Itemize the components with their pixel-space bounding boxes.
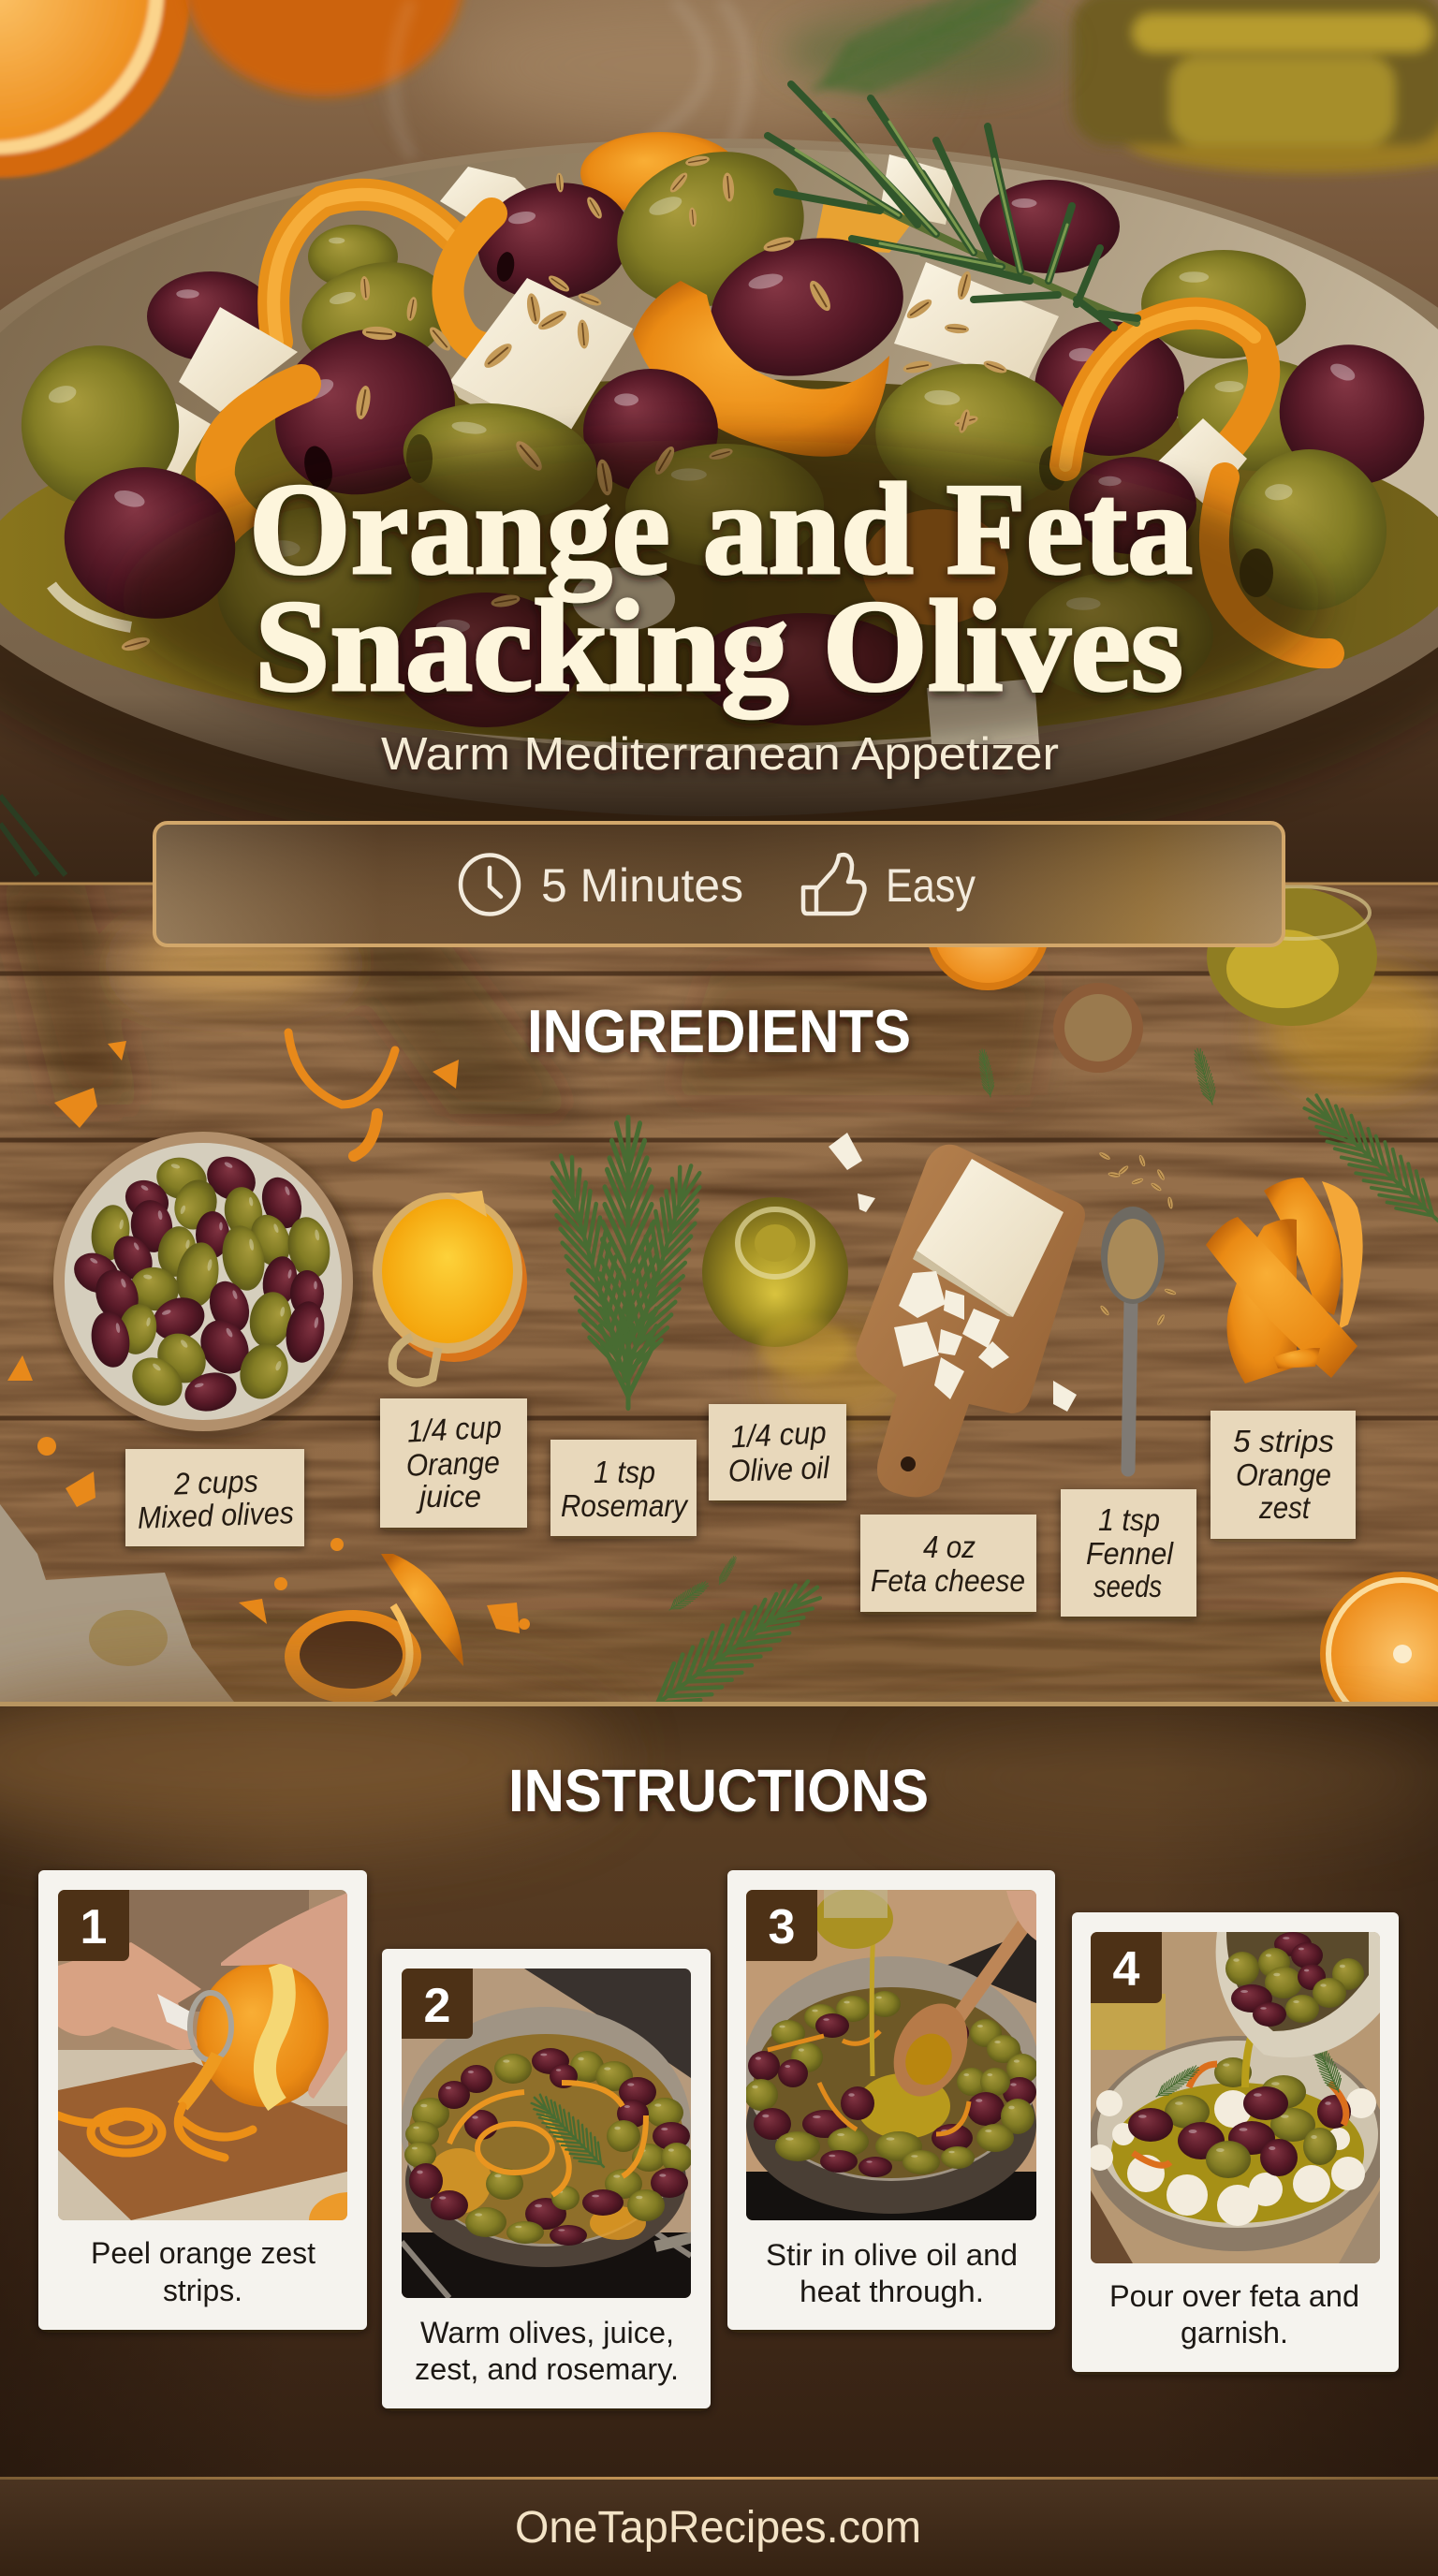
footer text: OneTapRecipes.com [515, 2503, 921, 2553]
note: 2 cups mixed olives: Mixed olives [137, 1495, 294, 1535]
note: 2 cups mixed olives: 2 cups [172, 1463, 258, 1501]
heading: instructions: INSTRUCTIONS [508, 1757, 929, 1824]
back layer of olives, feta and peel [4, 126, 1438, 744]
plank seams [0, 973, 1438, 1418]
info banner [154, 823, 1284, 945]
icon: clock [461, 856, 519, 914]
caption: garnish. [1181, 2316, 1288, 2349]
icon: glass of oil, top right [1207, 886, 1377, 1026]
label: 5 minutes: 5 Minutes [541, 859, 743, 912]
note: 1/4 cup orange juice: Orange [405, 1444, 500, 1483]
note: 1/4 cup olive oil: 1/4 cup [730, 1414, 828, 1455]
badge: 2: 2 [424, 1979, 450, 2033]
caption: Peel orange zest [91, 2236, 315, 2270]
note: 1/4 cup olive oil [709, 1404, 846, 1500]
icon: rosemary sprig, bottom [636, 1567, 832, 1728]
image: pouring over feta [1087, 1932, 1387, 2263]
note: 1 tsp fennel seeds: Fennel [1086, 1536, 1175, 1571]
icon: blurred olive oil jar [1072, 0, 1438, 173]
icon: orange peel cup [285, 1554, 463, 1704]
icon: blurred whole orange [183, 0, 463, 96]
dark wash behind title [122, 440, 1320, 758]
small rosemary, lower left [0, 796, 66, 875]
note: 1 tsp fennel seeds [1061, 1489, 1196, 1617]
panel: instructions background [0, 1676, 1438, 2576]
scattered peel, top left [288, 1032, 395, 1156]
note: 1 tsp fennel seeds: seeds [1093, 1569, 1162, 1603]
icon: thumbs up [803, 855, 864, 914]
badge: 1: 1 [81, 1900, 107, 1954]
caption: zest, and rosemary. [415, 2352, 679, 2386]
bowl [0, 139, 1438, 816]
icon: blurred rosemary [782, 0, 1063, 115]
badge: 4 [1091, 1932, 1162, 2003]
caption [1109, 2279, 1359, 2349]
note: 2 cups mixed olives [125, 1449, 304, 1546]
badge: 1 [58, 1890, 129, 1961]
icon: orange slice under banner [926, 867, 1049, 990]
badge: 3: 3 [769, 1900, 795, 1954]
icon: fennel seeds scatter [1098, 1151, 1177, 1326]
caption [766, 2238, 1018, 2308]
orange chips [7, 1041, 530, 1633]
fennel seeds on hero [120, 154, 1008, 653]
image: stirring in olive oil [743, 1889, 1039, 2228]
icon: cutting board with feta [829, 1133, 1085, 1497]
caption: strips. [163, 2274, 242, 2307]
caption [91, 2236, 315, 2307]
icon: blurred orange half, top left [0, 0, 190, 178]
note: 1 tsp rosemary [550, 1440, 697, 1536]
footer bar [0, 2477, 1438, 2576]
icon: bowl of ground fennel [1053, 983, 1143, 1073]
caption: Stir in olive oil and [766, 2238, 1018, 2272]
note: 5 strips orange zest [1211, 1411, 1356, 1539]
badge: 3 [746, 1890, 817, 1961]
rosemary garnish [768, 84, 1137, 328]
icon: jug of orange juice [373, 1191, 527, 1383]
front olives, left and right [47, 443, 1393, 653]
note: 1 tsp fennel seeds: 1 tsp [1098, 1502, 1160, 1537]
badge: 2 [402, 1969, 473, 2039]
steam wisps [393, 0, 747, 164]
note: 5 strips orange zest: 5 strips [1233, 1424, 1334, 1458]
icon: spoon of fennel seeds [1101, 1207, 1165, 1470]
note: 5 strips orange zest: zest [1258, 1490, 1312, 1525]
caption: Pour over feta and [1109, 2279, 1359, 2313]
cloth with seeds [0, 1504, 234, 1704]
note: 4 oz feta cheese: 4 oz [923, 1530, 976, 1564]
icon: olive oil bottle [702, 1197, 852, 1376]
heading: ingredients: INGREDIENTS [527, 997, 911, 1065]
icon: orange zest strips [1206, 1178, 1363, 1383]
note: 1/4 cup orange juice: 1/4 cup [406, 1409, 503, 1449]
note: 1 tsp rosemary: Rosemary [561, 1488, 689, 1523]
hero photo: olives in a bowl [0, 0, 1438, 883]
light and shadow bands [0, 883, 1438, 1704]
caption [415, 2316, 679, 2386]
note: 1 tsp rosemary: 1 tsp [594, 1455, 655, 1489]
caption: Warm olives, juice, [420, 2316, 674, 2349]
title [249, 457, 1193, 719]
note: 1/4 cup orange juice: juice [416, 1479, 481, 1514]
card: step 2 [382, 1949, 711, 2408]
note: 4 oz feta cheese [860, 1515, 1036, 1612]
card: step 1 [38, 1870, 367, 2330]
card: step 4 [1072, 1912, 1399, 2372]
image: peeling an orange [58, 1890, 347, 2220]
title: Snacking Olives [255, 574, 1183, 719]
icon: rosemary bundle [537, 1118, 714, 1408]
subtitle: Warm Mediterranean Appetizer [381, 729, 1059, 780]
panel: ingredients wood table [0, 867, 1438, 1736]
note: 5 strips orange zest: Orange [1236, 1457, 1331, 1492]
note: 1/4 cup orange juice [380, 1398, 527, 1528]
badge: 4: 4 [1113, 1942, 1140, 1997]
note: 1/4 cup olive oil: Olive oil [727, 1450, 831, 1488]
bowl shadow [0, 644, 1438, 821]
caption: heat through. [800, 2275, 984, 2308]
icon: bowl of mixed olives [53, 1132, 362, 1439]
label: easy: Easy [886, 859, 976, 912]
image: warming olives in pan [401, 1969, 693, 2298]
note: 4 oz feta cheese: Feta cheese [871, 1563, 1025, 1598]
icon: orange slice, bottom right [1320, 1572, 1438, 1736]
title: Orange and Feta [249, 457, 1193, 602]
card: step 3 [727, 1870, 1055, 2330]
small rosemary sprigs on table [666, 1046, 1438, 1615]
